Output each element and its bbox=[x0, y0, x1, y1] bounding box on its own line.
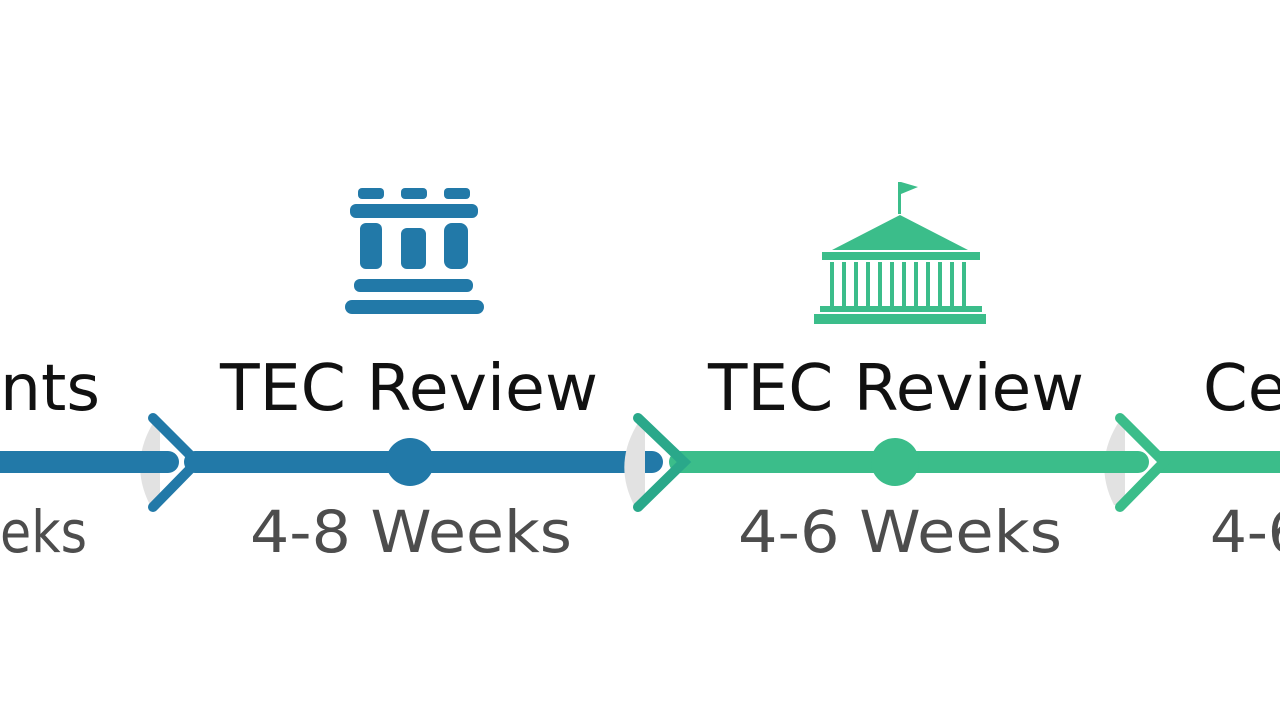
timeline segment: green bbox=[624, 418, 1280, 507]
stage titles: TEC Review bbox=[707, 352, 1084, 426]
durations: eks bbox=[0, 498, 87, 566]
icon: government building bbox=[814, 182, 986, 324]
timeline segment: blue bbox=[0, 418, 652, 507]
stage titles: TEC Review bbox=[219, 352, 598, 426]
durations: 4-8 Weeks bbox=[250, 498, 572, 566]
icon: lab columns bbox=[345, 188, 484, 314]
stage titles bbox=[0, 352, 1280, 426]
durations bbox=[0, 498, 1280, 566]
durations: 4-6 Weeks bbox=[738, 498, 1062, 566]
stage titles: nts bbox=[0, 352, 100, 426]
